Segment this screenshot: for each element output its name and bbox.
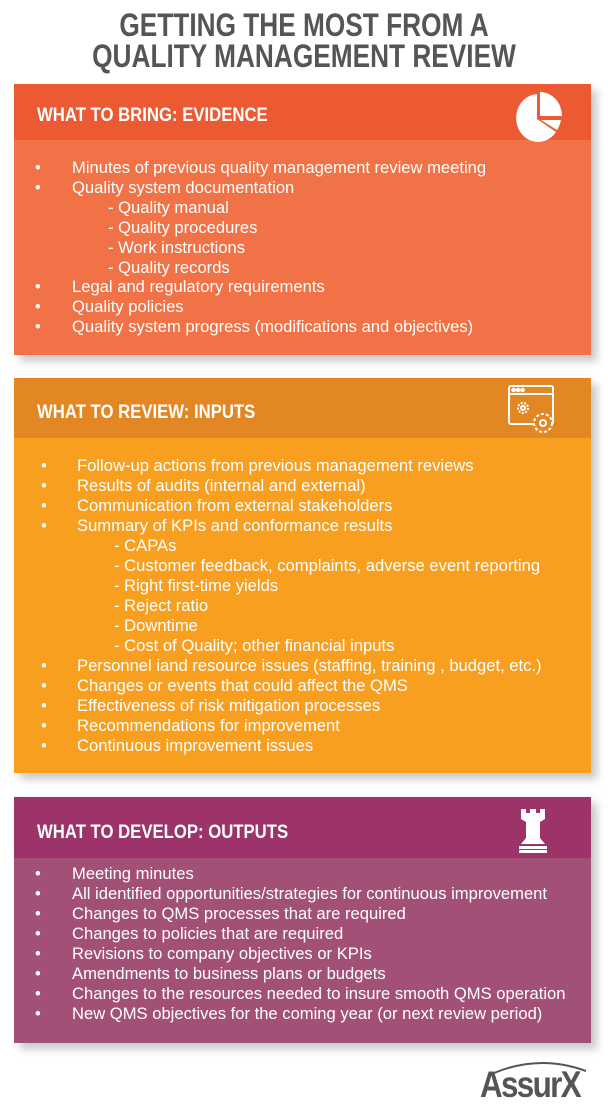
- list: inputs items: Follow-up actions from previous management reviews: [77, 456, 474, 475]
- list: inputs items: Communication from external stakeholders: [77, 496, 392, 515]
- list: outputs items: Meeting minutes: [72, 864, 194, 883]
- list: evidence items: Quality system documentation: [72, 178, 294, 197]
- list: evidence items: •: [35, 297, 41, 316]
- list: evidence items: - Quality procedures: [108, 218, 257, 237]
- list: inputs items: - Customer feedback, complaints, adverse event reporting: [114, 556, 540, 575]
- panel: evidence: [14, 84, 591, 355]
- header: what to review: WHAT TO REVIEW: INPUTS: [37, 402, 255, 423]
- list: outputs items: All identified opportunities/strategies for continuous improvement: [72, 884, 547, 903]
- icon: chess rook: [519, 809, 547, 853]
- list: evidence items: Quality policies: [72, 297, 184, 316]
- list: outputs items: [35, 864, 566, 1023]
- list: inputs items: Changes or events that could affect the QMS: [77, 676, 408, 695]
- list: inputs items: - CAPAs: [114, 536, 176, 555]
- list: evidence items: Minutes of previous quality management review meeting: [72, 158, 486, 177]
- list: inputs items: •: [41, 516, 47, 535]
- list: inputs items: Continuous improvement issues: [77, 736, 313, 755]
- list: evidence items: [35, 158, 486, 336]
- list: inputs items: •: [41, 656, 47, 675]
- list: outputs items: •: [35, 944, 41, 963]
- header: what to develop: [14, 797, 591, 858]
- header: what to bring: WHAT TO BRING: EVIDENCE: [37, 105, 268, 126]
- list: evidence items: •: [35, 178, 41, 197]
- list: evidence items: Legal and regulatory requirements: [72, 277, 325, 296]
- list: outputs items: Changes to QMS processes that are required: [72, 904, 406, 923]
- list: inputs items: Recommendations for improvement: [77, 716, 340, 735]
- list: inputs items: - Reject ratio: [114, 596, 208, 615]
- list: inputs items: •: [41, 716, 47, 735]
- list: inputs items: Summary of KPIs and conformance results: [77, 516, 392, 535]
- list: outputs items: Amendments to business plans or budgets: [72, 964, 386, 983]
- header: what to develop: WHAT TO DEVELOP: OUTPUTS: [37, 822, 288, 843]
- list: outputs items: •: [35, 904, 41, 923]
- list: evidence items: Quality system progress (modifications and objectives): [72, 317, 473, 336]
- list: inputs items: Results of audits (internal and external): [77, 476, 366, 495]
- list: outputs items: Revisions to company objectives or KPIs: [72, 944, 372, 963]
- list: inputs items: Personnel iand resource issues (staffing, training , budget, etc.): [77, 656, 542, 675]
- list: outputs items: •: [35, 964, 41, 983]
- list: inputs items: •: [41, 456, 47, 475]
- title: [92, 7, 516, 74]
- list: inputs items: - Downtime: [114, 616, 198, 635]
- title: QUALITY MANAGEMENT REVIEW: [92, 38, 516, 74]
- list: inputs items: Effectiveness of risk mitigation processes: [77, 696, 380, 715]
- list: outputs items: •: [35, 924, 41, 943]
- list: outputs items: New QMS objectives for the coming year (or next review period): [72, 1004, 542, 1023]
- list: evidence items: •: [35, 317, 41, 336]
- panel: inputs: [14, 378, 591, 773]
- icon: window with gears: [508, 385, 554, 433]
- logo: AssurX: AssurX: [480, 1064, 580, 1105]
- title: GETTING THE MOST FROM A: [119, 7, 489, 43]
- list: evidence items: - Quality manual: [108, 198, 229, 217]
- list: inputs items: [41, 456, 542, 755]
- icon: pie chart: [516, 92, 562, 142]
- header: what to bring: [14, 84, 591, 140]
- list: evidence items: •: [35, 277, 41, 296]
- list: outputs items: •: [35, 1004, 41, 1023]
- list: outputs items: Changes to the resources needed to insure smooth QMS operation: [72, 984, 566, 1003]
- list: outputs items: •: [35, 864, 41, 883]
- panel: outputs: [14, 797, 591, 1043]
- header: what to review: [14, 378, 591, 438]
- list: inputs items: •: [41, 676, 47, 695]
- list: inputs items: •: [41, 496, 47, 515]
- list: inputs items: - Cost of Quality; other financial inputs: [114, 636, 394, 655]
- list: evidence items: - Quality records: [108, 258, 230, 277]
- list: inputs items: - Right first-time yields: [114, 576, 278, 595]
- list: inputs items: •: [41, 476, 47, 495]
- list: evidence items: •: [35, 158, 41, 177]
- list: inputs items: •: [41, 736, 47, 755]
- list: outputs items: •: [35, 884, 41, 903]
- list: outputs items: Changes to policies that are required: [72, 924, 343, 943]
- list: outputs items: •: [35, 984, 41, 1003]
- list: inputs items: •: [41, 696, 47, 715]
- list: evidence items: - Work instructions: [108, 238, 245, 257]
